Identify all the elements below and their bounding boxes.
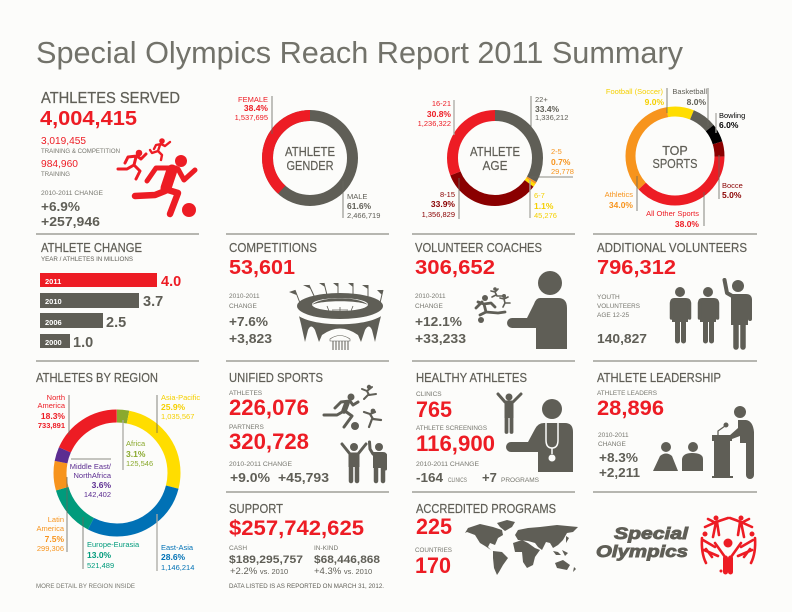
panel: support: +4.3% vs. 2010 <box>314 566 372 577</box>
icon: three volunteers <box>670 280 752 347</box>
panel: unified sports: ATHLETES <box>229 390 263 397</box>
panel: unified sports: PARTNERS <box>229 424 264 431</box>
chart: top sports donut: 8.0% <box>687 97 706 107</box>
panel: support <box>229 502 384 590</box>
chart: athletes by region donut: Middle East/ <box>70 462 112 471</box>
panel: athlete leadership: +8.3% <box>599 450 638 465</box>
chart: athletes by region donut: 3.1% <box>126 449 146 459</box>
chart: athletes by region donut: 299,306 <box>37 544 64 553</box>
chart: athlete gender donut: MALE <box>347 192 367 201</box>
panel: accredited programs: ACCREDITED PROGRAMS <box>416 502 556 516</box>
chart: athletes by region donut <box>36 371 200 590</box>
panel: athletes served: +257,946 <box>41 214 100 229</box>
panel: competitions: +3,823 <box>229 331 272 346</box>
chart: athletes by region donut: America <box>37 401 66 410</box>
panel: volunteer coaches: +12.1% <box>415 314 462 329</box>
panel: athletes served: TRAINING <box>41 171 70 178</box>
icon: players and partners <box>324 385 387 481</box>
chart: athlete age donut: 1,336,212 <box>535 113 568 122</box>
panel: volunteer coaches: 306,652 <box>415 257 495 279</box>
panel: support: $68,446,868 <box>314 554 380 566</box>
panel: healthy athletes <box>416 371 573 485</box>
bar chart: 2011 <box>45 277 61 286</box>
chart: athletes by region donut: Latin <box>48 515 64 524</box>
panel: athletes served: 984,960 <box>41 159 78 170</box>
panel: additional volunteers: VOLUNTEERS <box>597 303 641 310</box>
panel: accredited programs <box>415 502 578 578</box>
panel: accredited programs: 170 <box>415 553 451 578</box>
chart: athlete age donut: 33.9% <box>431 199 455 209</box>
chart: athletes by region donut: 13.0% <box>87 550 112 560</box>
chart: athlete gender donut: 2,466,719 <box>347 211 380 220</box>
panel: athlete leadership: 28,896 <box>597 397 664 420</box>
chart: athlete age donut: 6-7 <box>534 191 545 200</box>
icon: world map <box>465 520 578 575</box>
panel: unified sports: +45,793 <box>278 470 329 485</box>
chart: athlete age donut: ATHLETE <box>470 145 520 159</box>
bar chart: 3.7 <box>143 294 163 310</box>
chart: athlete age donut: 33.4% <box>535 104 560 114</box>
panel: healthy athletes: 116,900 <box>416 431 495 456</box>
logo: special olympics emblem <box>702 516 755 572</box>
panel: athlete leadership: CHANGE <box>598 441 626 448</box>
chart: top sports donut: Bowling <box>719 111 745 120</box>
panel: athletes served: TRAINING & COMPETITION <box>41 148 120 155</box>
chart: athlete age donut: 0.7% <box>551 157 571 167</box>
chart: athletes by region donut: 28.6% <box>161 552 186 562</box>
chart: athlete gender donut: 1,537,695 <box>235 113 268 122</box>
panel: unified sports <box>229 371 387 485</box>
chart: top sports donut: Athletics <box>605 190 633 199</box>
panel: athlete leadership: +2,211 <box>599 465 640 480</box>
chart: top sports donut: All Other Sports <box>646 209 699 218</box>
chart: athlete age donut: 29,778 <box>551 167 574 176</box>
chart: athlete gender donut <box>235 95 380 220</box>
panel: athletes served <box>40 90 196 229</box>
chart: top sports donut: 5.0% <box>722 190 742 200</box>
chart: top sports donut: SPORTS <box>652 157 698 171</box>
panel: unified sports: 320,728 <box>229 429 309 454</box>
chart: top sports donut: Bocce <box>722 181 743 190</box>
chart: top sports donut <box>605 87 745 229</box>
icon: speaker at podium with audience <box>653 406 754 479</box>
chart: athlete age donut: 45,276 <box>534 211 557 220</box>
chart: athletes by region donut: 7.5% <box>45 534 64 544</box>
panel: competitions: +7.6% <box>229 314 268 329</box>
panel: volunteer coaches: CHANGE <box>415 303 443 310</box>
chart: athletes by region donut: 25.9% <box>161 402 186 412</box>
title: Special Olympics Reach Report 2011 Summary <box>36 35 683 70</box>
panel: athletes served: 4,004,415 <box>40 108 137 130</box>
panel: support: +2.2% vs. 2010 <box>230 566 288 577</box>
panel: unified sports: UNIFIED SPORTS <box>229 371 323 385</box>
chart: athlete gender donut: ATHLETE <box>285 145 335 159</box>
panel: healthy athletes: -164 <box>416 470 444 485</box>
chart: athlete age donut: AGE <box>482 159 508 173</box>
panel: unified sports: 2010-2011 CHANGE <box>229 461 293 468</box>
panel: volunteer coaches <box>415 241 567 349</box>
panel: additional volunteers: YOUTH <box>597 294 620 301</box>
chart: athlete age donut: 22+ <box>535 95 548 104</box>
chart: athletes by region donut: NorthAfrica <box>73 471 112 480</box>
icon: coach with small players <box>476 271 567 349</box>
icon: doctor and athlete <box>498 394 573 472</box>
panel: athletes served: 2010-2011 CHANGE <box>41 190 104 197</box>
chart: athletes by region donut: 18.3% <box>41 411 65 421</box>
panel: healthy athletes: PROGRAMS <box>501 477 540 484</box>
chart: top sports donut: TOP <box>662 144 688 158</box>
chart: athlete age donut: 1.1% <box>534 201 554 211</box>
panel: additional volunteers: AGE 12-25 <box>597 312 630 319</box>
chart: athletes by region donut: Africa <box>126 439 146 448</box>
chart: athletes by region donut: Europe-Eurasia <box>87 540 140 549</box>
panel: additional volunteers: 796,312 <box>597 257 676 279</box>
panel: additional volunteers: ADDITIONAL VOLUNTEERS <box>597 241 747 255</box>
bar chart: 4.0 <box>161 274 181 290</box>
panel: competitions: 53,601 <box>229 257 295 279</box>
chart: athlete age donut: 2-5 <box>551 147 562 156</box>
chart: athletes by region donut: 1,146,214 <box>161 563 194 572</box>
chart: athlete gender donut: FEMALE <box>238 95 268 104</box>
chart: athletes by region donut: 3.6% <box>92 480 111 490</box>
panel: healthy athletes: CLINICS <box>416 391 442 398</box>
panel: athlete change <box>40 241 181 351</box>
chart: athletes by region donut: MORE DETAIL BY REGION INSIDE <box>36 583 136 590</box>
chart: athletes by region donut: Asia-Pacific <box>161 393 200 402</box>
panel: athlete leadership: ATHLETE LEADERS <box>597 390 658 397</box>
chart: athlete gender donut: GENDER <box>286 159 334 173</box>
logo: special olympics wordmark <box>596 524 690 561</box>
panel: healthy athletes: 765 <box>416 397 452 422</box>
icon: red soccer players <box>118 138 196 217</box>
bar chart: 2.5 <box>106 315 126 331</box>
chart: top sports donut: 9.0% <box>645 97 664 107</box>
bar chart <box>40 273 181 351</box>
chart: athlete age donut <box>418 95 574 220</box>
chart: athletes by region donut: North <box>47 393 65 402</box>
panel: accredited programs: COUNTRIES <box>415 547 453 554</box>
panel: competitions: 2010-2011 <box>229 293 260 300</box>
panel: healthy athletes: HEALTHY ATHLETES <box>416 371 527 385</box>
panel: volunteer coaches: 2010-2011 <box>415 293 446 300</box>
chart: athlete age donut: 16-21 <box>432 99 451 108</box>
chart: athletes by region donut: America <box>36 524 65 533</box>
bar chart: 2010 <box>45 297 62 306</box>
panel: support: CASH <box>229 545 247 552</box>
panel: healthy athletes: ATHLETE SCREENINGS <box>416 425 488 432</box>
chart: athletes by region donut: East-Asia <box>161 543 194 552</box>
bar chart: 1.0 <box>73 335 93 351</box>
panel: additional volunteers <box>597 241 752 347</box>
panel: athletes served: +6.9% <box>41 199 80 214</box>
chart: athletes by region donut: 521,489 <box>87 561 114 570</box>
icon: stadium <box>289 283 383 350</box>
panel: support: $257,742,625 <box>229 517 364 540</box>
panel: athlete leadership: 2010-2011 <box>598 432 629 439</box>
panel: volunteer coaches: +33,233 <box>415 331 466 346</box>
panel: accredited programs: 225 <box>416 514 452 539</box>
logo: special olympics wordmark: Special <box>614 524 690 543</box>
chart: athlete gender donut: 61.6% <box>347 201 372 211</box>
chart: athlete age donut: 30.8% <box>427 109 451 119</box>
chart: athlete age donut: 1,356,829 <box>422 210 455 219</box>
chart: top sports donut: 6.0% <box>719 120 739 130</box>
panel: competitions: CHANGE <box>229 303 257 310</box>
panel: volunteer coaches: VOLUNTEER COACHES <box>415 241 542 255</box>
panel: healthy athletes: +7 <box>482 470 497 485</box>
chart: top sports donut: 34.0% <box>609 200 633 210</box>
panel: support: IN-KIND <box>314 545 338 552</box>
panel: athletes served: ATHLETES SERVED <box>41 90 180 107</box>
panel: competitions: COMPETITIONS <box>229 241 317 255</box>
panel: support: SUPPORT <box>229 502 283 516</box>
chart: athletes by region donut: 142,402 <box>84 490 111 499</box>
panel: unified sports: +9.0% <box>230 470 270 485</box>
bar chart: 2000 <box>45 338 62 347</box>
panel: healthy athletes: CLINICS <box>448 477 467 484</box>
panel: additional volunteers: 140,827 <box>597 331 647 346</box>
bar chart: 2006 <box>45 318 62 327</box>
panel: athlete change: ATHLETE CHANGE <box>41 241 142 255</box>
chart: athlete gender donut: 38.4% <box>244 103 268 113</box>
panel: athlete leadership: ATHLETE LEADERSHIP <box>597 371 721 385</box>
chart: athletes by region donut: ATHLETES BY REGION <box>36 371 158 385</box>
chart: athletes by region donut: 733,891 <box>38 421 65 430</box>
chart: top sports donut: Football (Soccer) <box>606 87 663 96</box>
chart: athletes by region donut: 1,035,567 <box>161 412 194 421</box>
panel: athletes served: 3,019,455 <box>41 136 86 147</box>
chart: athlete age donut: 8-15 <box>440 190 455 199</box>
panel: support: $189,295,757 <box>229 554 303 566</box>
chart: athlete age donut: 1,236,322 <box>418 119 451 128</box>
chart: top sports donut: 38.0% <box>675 219 699 229</box>
panel: support: DATA LISTED IS AS REPORTED ON MARCH 31, 2012. <box>229 583 384 590</box>
chart: top sports donut: Basketball <box>672 87 707 96</box>
panel: unified sports: 226,076 <box>229 395 309 420</box>
panel: athlete leadership <box>597 371 754 480</box>
panel: competitions <box>229 241 383 350</box>
logo: special olympics wordmark: Olympics <box>596 542 688 561</box>
panel: healthy athletes: 2010-2011 CHANGE <box>416 461 480 468</box>
panel: athlete change: YEAR / ATHLETES IN MILLIONS <box>41 256 134 263</box>
chart: athletes by region donut: 125,546 <box>126 459 153 468</box>
